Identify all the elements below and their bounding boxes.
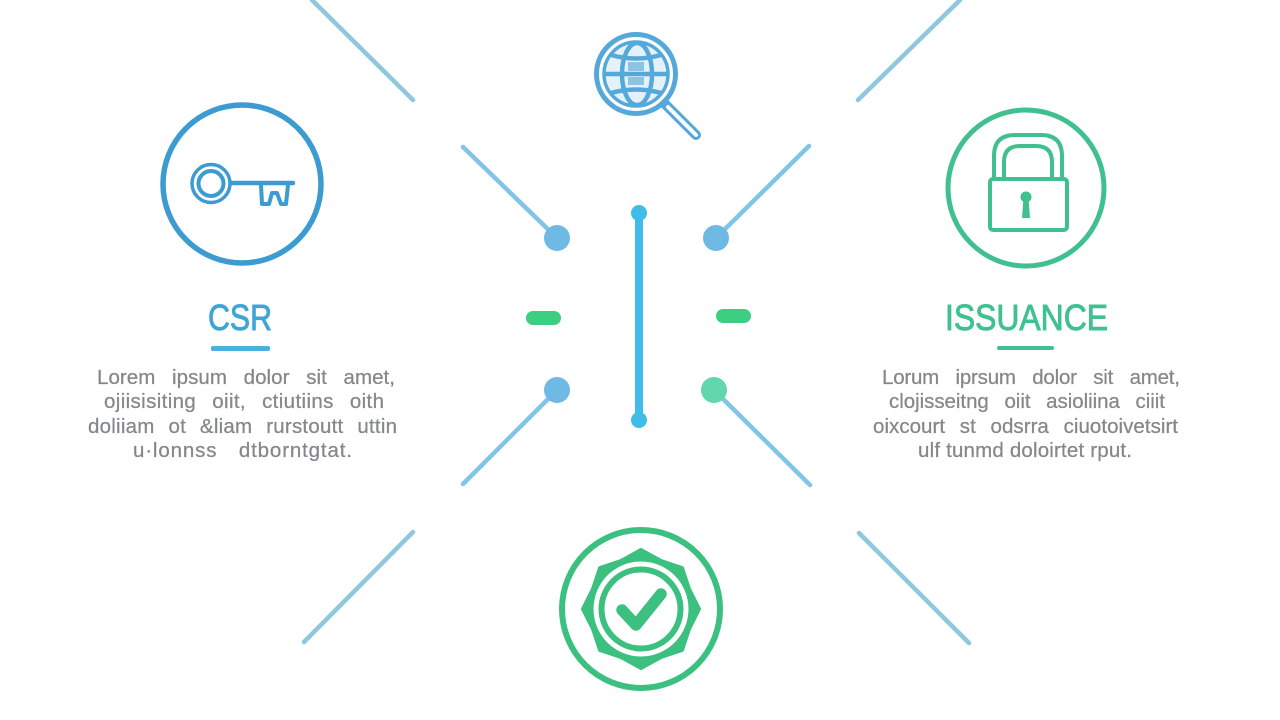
heading underline: CSR (211, 346, 270, 351)
icon: key in circle (163, 105, 321, 263)
inner connector: top left (463, 147, 570, 251)
text block: CSR description: ojiisisiting oiit, ctiutiins oith (104, 390, 384, 413)
text block: CSR description: Lorem ipsum dolor sit amet, (97, 366, 395, 389)
text block: ISSUANCE description: ulf tunmd doloirtet rput. (918, 439, 1132, 462)
central vertical bar (631, 205, 647, 428)
inner connector: bottom right (701, 377, 810, 485)
text block: ISSUANCE description: Lorum iprsum dolor sit amet, (882, 366, 1180, 389)
left green dash (526, 311, 561, 325)
panel: CSR (88, 297, 397, 462)
text block: CSR description: u·lonnss dtborntgtat. (133, 439, 352, 462)
text block: ISSUANCE description: clojisseitng oiit asioliina ciiit (889, 390, 1165, 413)
inner connector: top right (703, 146, 809, 251)
right green dash (716, 309, 751, 323)
icon: verified badge with check mark (562, 530, 720, 688)
icon: magnifying glass over globe (596, 34, 696, 135)
icon: padlock in circle (948, 110, 1104, 266)
heading: ISSUANCE: ISSUANCE (945, 297, 1108, 338)
outer diagonal connectors (304, 0, 969, 643)
inner connector: bottom left (463, 377, 570, 484)
text block: ISSUANCE description: oixcourt st odsrra ciuotoivetsirt (873, 415, 1178, 438)
text block: CSR description: doliiam ot &liam rurstoutt uttin (88, 415, 397, 438)
text block: ISSUANCE description (873, 366, 1180, 462)
heading: CSR: CSR (208, 297, 272, 338)
text block: CSR description (88, 366, 397, 462)
panel: ISSUANCE (873, 297, 1180, 462)
heading underline: ISSUANCE (997, 346, 1054, 350)
